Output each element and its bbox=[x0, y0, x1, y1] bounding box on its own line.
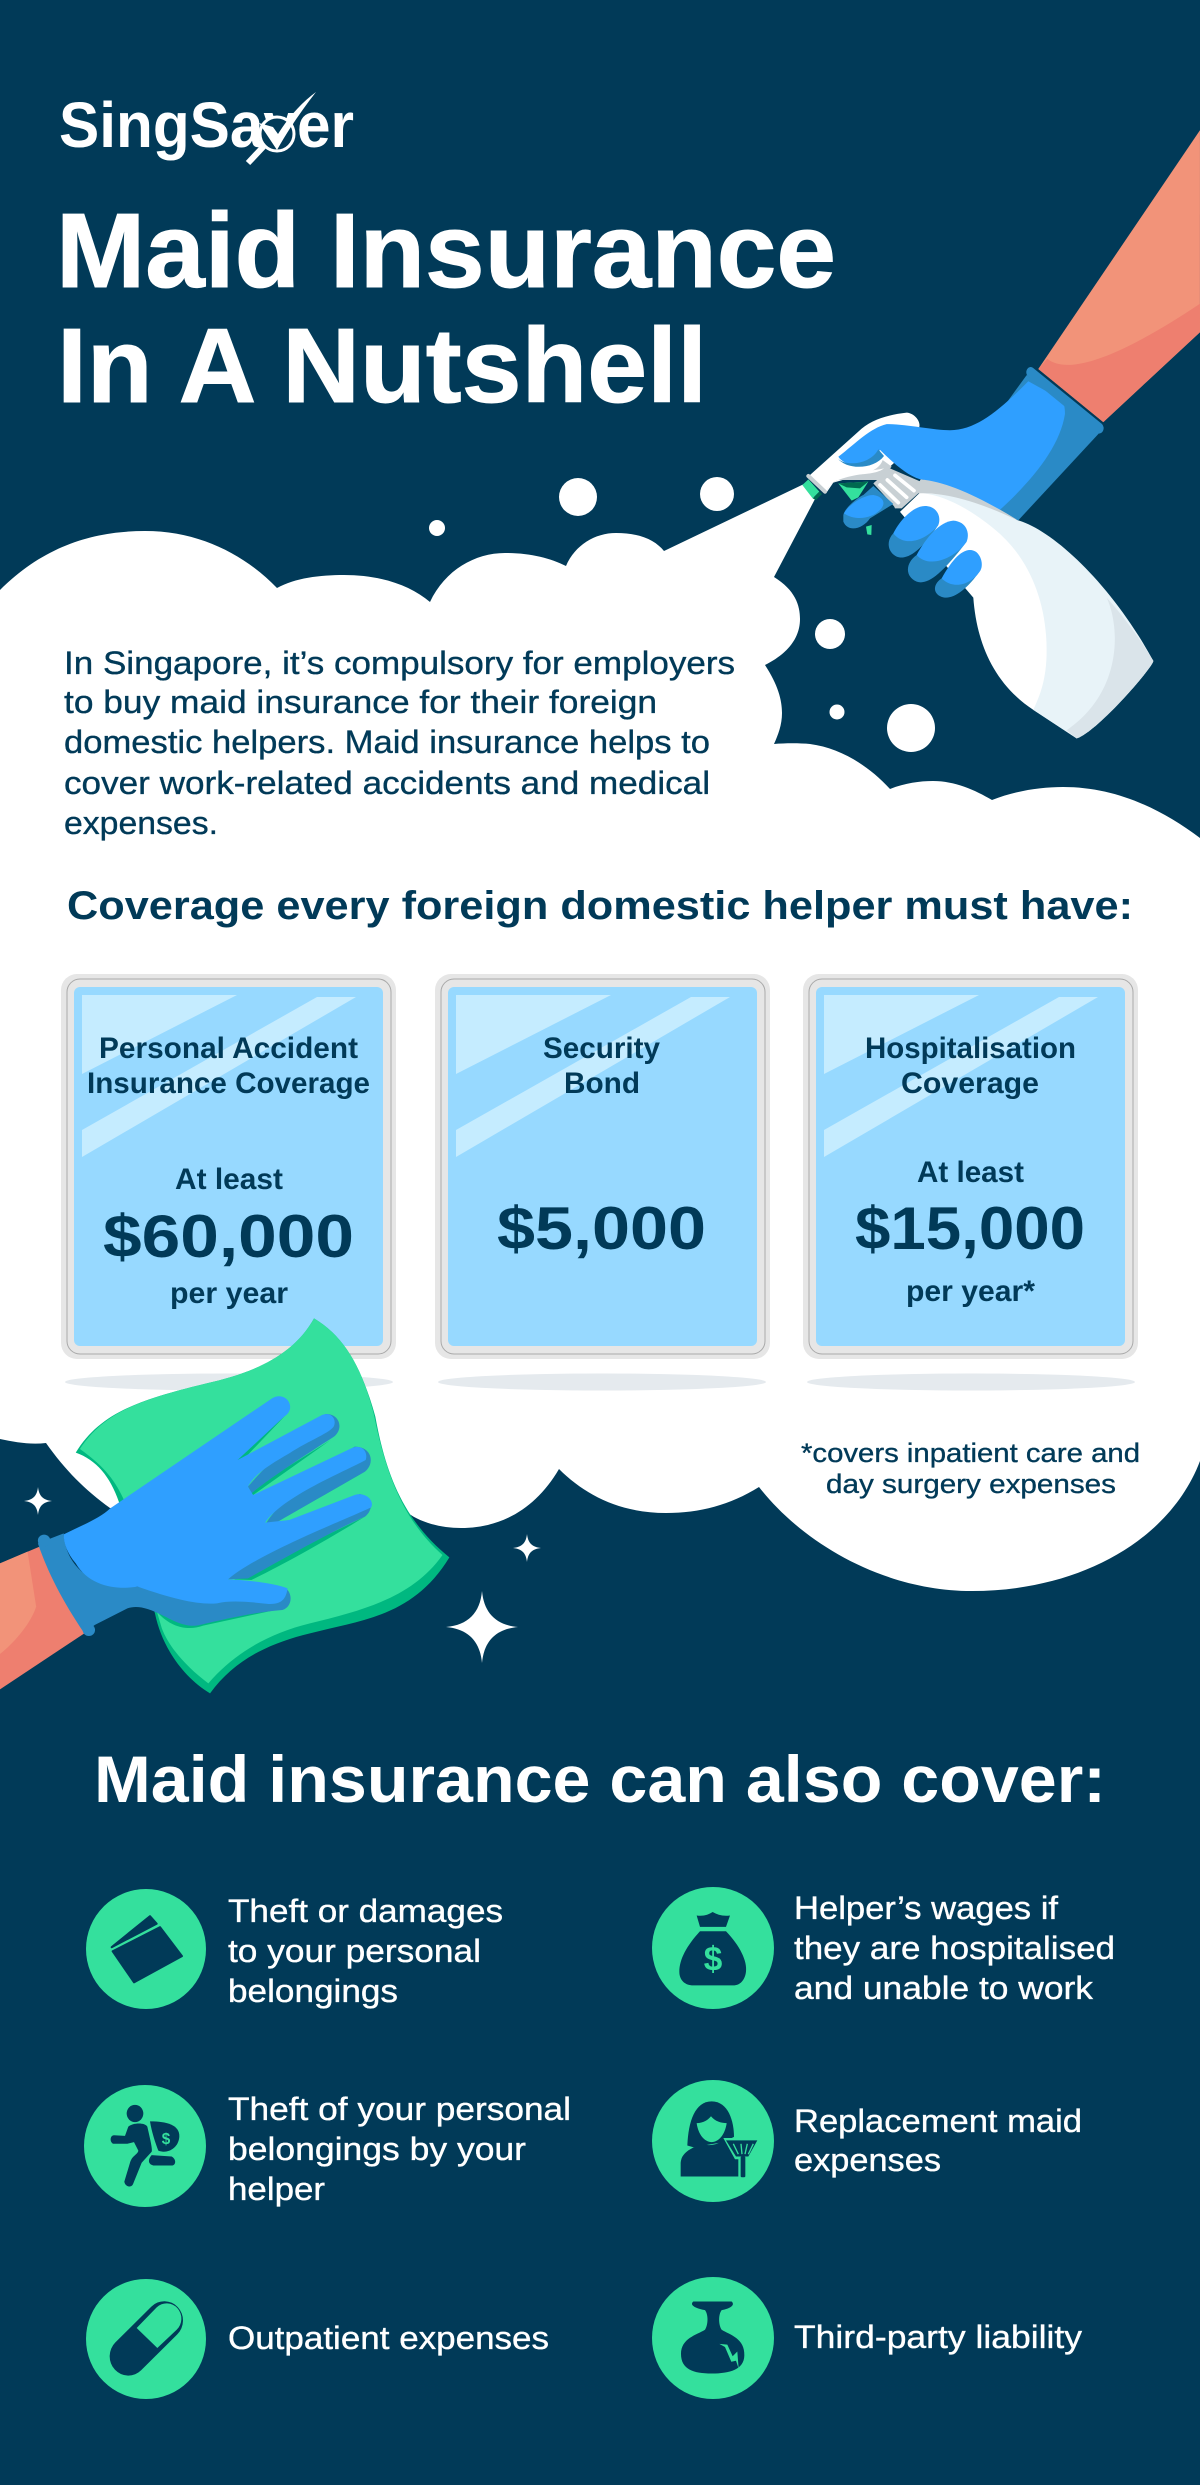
card text: Insurance Coverage bbox=[87, 1067, 370, 1100]
panel: security bond card bbox=[435, 974, 770, 1359]
card text: At least bbox=[917, 1156, 1024, 1189]
title: In A Nutshell bbox=[57, 307, 707, 425]
text: and unable to work bbox=[794, 1970, 1094, 2006]
intro paragraph: In Singapore, it’s compulsory for employers bbox=[64, 645, 735, 681]
illustration: gloved hand with spray bottle bbox=[802, 130, 1200, 738]
glove bbox=[838, 372, 1099, 510]
icon: wallet bbox=[86, 1889, 206, 2009]
text bbox=[228, 2091, 571, 2207]
forearm bbox=[0, 1547, 84, 1689]
title bbox=[56, 192, 836, 425]
heading: coverage: Coverage every foreign domestic helper must have: bbox=[67, 884, 1133, 928]
text: to your personal bbox=[228, 1933, 481, 1969]
text bbox=[228, 1893, 503, 2009]
card text: Hospitalisation bbox=[865, 1032, 1076, 1065]
text: belongings by your bbox=[228, 2131, 526, 2167]
card text bbox=[855, 1032, 1085, 1308]
card text: $15,000 bbox=[855, 1195, 1085, 1262]
trigger and fingers bbox=[838, 449, 1020, 598]
item: theft or damages bbox=[86, 1889, 503, 2009]
text bbox=[794, 1890, 1115, 2006]
heading: also cover: Maid insurance can also cover: bbox=[94, 1742, 1106, 1816]
intro paragraph: domestic helpers. Maid insurance helps to bbox=[64, 724, 710, 760]
arm bbox=[960, 130, 1200, 522]
illustration: gloved hand wiping with cloth bbox=[0, 1318, 449, 1693]
icon: money bag: $ bbox=[704, 1940, 722, 1979]
card text: per year bbox=[170, 1277, 288, 1310]
card text: Coverage bbox=[901, 1067, 1039, 1100]
item: third-party liability bbox=[652, 2277, 1082, 2399]
intro paragraph: expenses. bbox=[64, 805, 218, 841]
card frame bbox=[61, 974, 396, 1359]
card text: Bond bbox=[564, 1067, 640, 1100]
panel: hospitalisation card bbox=[803, 974, 1138, 1359]
intro paragraph bbox=[64, 645, 735, 841]
bottle body bbox=[900, 489, 1153, 738]
card frame bbox=[435, 974, 770, 1359]
card text: Personal Accident bbox=[99, 1032, 358, 1065]
spray head bbox=[802, 413, 920, 535]
icon: running thief with money bag: $ bbox=[162, 2131, 171, 2148]
card text: $60,000 bbox=[103, 1203, 354, 1270]
text: Theft of your personal bbox=[228, 2091, 571, 2127]
card text: At least bbox=[175, 1163, 283, 1196]
panel: personal accident card bbox=[61, 974, 396, 1359]
cloth bbox=[76, 1318, 449, 1693]
text: expenses bbox=[794, 2142, 941, 2178]
card text: per year* bbox=[906, 1275, 1035, 1308]
text: helper bbox=[228, 2171, 325, 2207]
text: they are hospitalised bbox=[794, 1930, 1115, 1966]
item: helper wages bbox=[652, 1887, 1115, 2009]
footnote: day surgery expenses bbox=[826, 1469, 1116, 1499]
item: replacement maid bbox=[652, 2080, 1082, 2202]
footnote: *covers inpatient care and bbox=[801, 1438, 1140, 1468]
icon: pill bbox=[86, 2279, 206, 2399]
item: theft by helper bbox=[84, 2085, 571, 2207]
icon: maid with broom bbox=[652, 2080, 774, 2202]
card text: $5,000 bbox=[497, 1195, 706, 1262]
text: Theft or damages bbox=[228, 1893, 503, 1929]
footnote bbox=[801, 1438, 1140, 1499]
text: Outpatient expenses bbox=[228, 2320, 549, 2356]
text: Third-party liability bbox=[794, 2319, 1082, 2355]
logo: SingSaver: SingSaver bbox=[59, 89, 354, 161]
card shadows bbox=[65, 1374, 1135, 1390]
text: Helper’s wages if bbox=[794, 1890, 1058, 1926]
card text bbox=[497, 1032, 706, 1262]
card text: Security bbox=[543, 1032, 660, 1065]
sparkles bbox=[24, 1487, 541, 1663]
icon: running thief with money bag bbox=[84, 2085, 206, 2207]
icon: money bag bbox=[652, 1887, 774, 2009]
intro paragraph: to buy maid insurance for their foreign bbox=[64, 684, 657, 720]
title: Maid Insurance bbox=[56, 192, 836, 310]
card text bbox=[87, 1032, 370, 1310]
foam cloud background bbox=[0, 484, 1200, 1591]
text: Replacement maid bbox=[794, 2103, 1082, 2139]
text bbox=[794, 2103, 1082, 2178]
icon: cracked vase bbox=[652, 2277, 774, 2399]
intro paragraph: cover work-related accidents and medical bbox=[64, 765, 710, 801]
glove bbox=[38, 1396, 372, 1636]
bubbles bbox=[429, 477, 935, 752]
text: belongings bbox=[228, 1973, 398, 2009]
card frame bbox=[803, 974, 1138, 1359]
item: outpatient expenses bbox=[86, 2279, 549, 2399]
